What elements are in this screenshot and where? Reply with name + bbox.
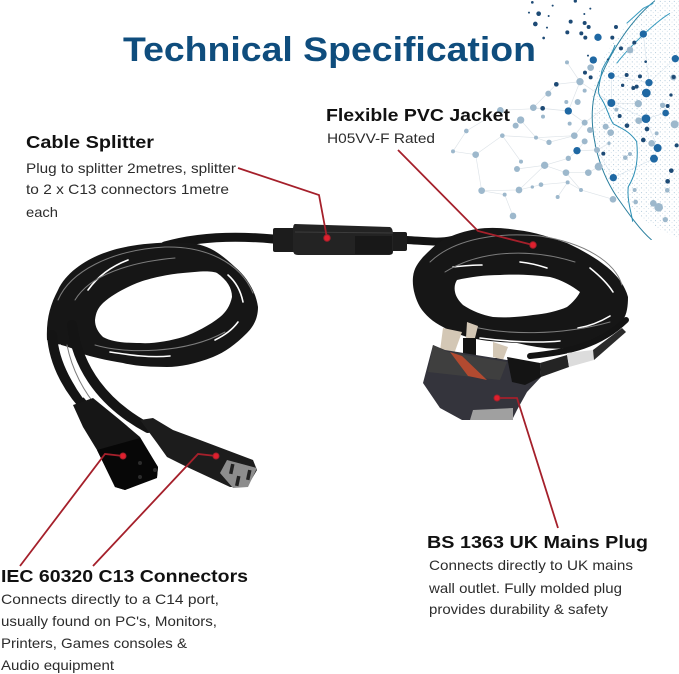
- label: cable splitter: each: [26, 204, 58, 220]
- label: BS 1363 UK mains plug: Connects directly to UK mains: [429, 557, 633, 573]
- cable splitter box: [273, 224, 407, 255]
- cable: right coil: [407, 228, 628, 356]
- label: BS 1363 UK mains plug: BS 1363 UK Mains Plug: [427, 532, 648, 552]
- label: flexible PVC jacket: H05VV-F Rated: [327, 130, 435, 146]
- cable: left coil: [47, 237, 273, 428]
- label: IEC 60320 C13 connectors: Audio equipment: [1, 657, 114, 673]
- red pointer: mains plug: [494, 395, 558, 528]
- red pointer: left C13: [20, 453, 126, 566]
- label: BS 1363 UK mains plug: wall outlet. Fully molded plug: [428, 580, 622, 596]
- label: IEC 60320 C13 connectors: IEC 60320 C13 Connectors: [1, 566, 248, 586]
- label: IEC 60320 C13 connectors: Connects directly to a C14 port,: [1, 591, 219, 607]
- label: cable splitter: to 2 x C13 connectors 1metre: [26, 181, 229, 197]
- label: IEC 60320 C13 connectors: usually found on PC's, Monitors,: [1, 613, 217, 629]
- red pointer: PVC jacket: [398, 150, 536, 248]
- label: flexible PVC jacket: Flexible PVC Jacket: [326, 105, 510, 125]
- label: flexible PVC jacket: [326, 105, 510, 146]
- label: cable splitter: [26, 132, 236, 220]
- red pointer: right C13: [93, 453, 219, 566]
- globe network graphic: [451, 0, 679, 244]
- C13 connector: left: [73, 398, 158, 490]
- red pointer: cable splitter: [238, 168, 330, 241]
- label: IEC 60320 C13 connectors: [1, 566, 248, 673]
- C13 connector: right: [140, 418, 257, 488]
- label: IEC 60320 C13 connectors: Printers, Games consoles &: [1, 635, 188, 651]
- label: BS 1363 UK mains plug: provides durability & safety: [429, 601, 608, 617]
- label: cable splitter: Plug to splitter 2metres, splitter: [26, 160, 236, 176]
- UK mains plug: [423, 322, 626, 420]
- label: BS 1363 UK mains plug: [427, 532, 648, 617]
- label: cable splitter: Cable Splitter: [26, 132, 154, 152]
- title: Technical Specification: [123, 31, 536, 69]
